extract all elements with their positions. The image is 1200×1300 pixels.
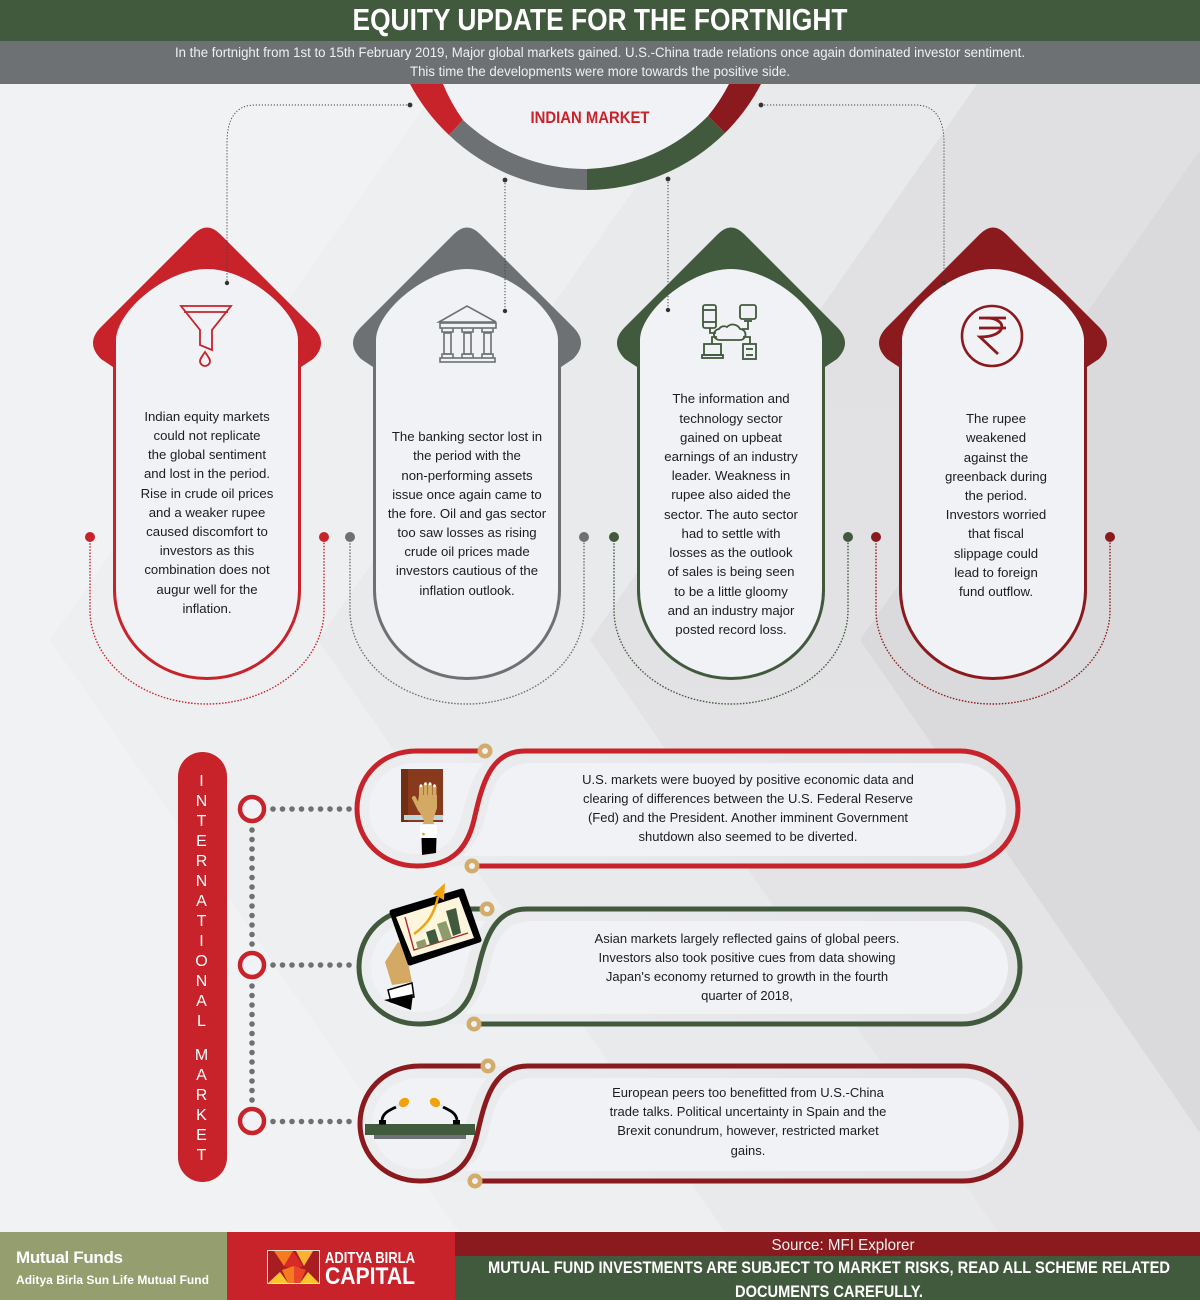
text: rupee: lead to foreign [954,565,1038,580]
text: indian equity: Rise in crude oil prices [141,486,274,501]
text: information technology: The information and [672,391,790,406]
card 4: rupee [871,228,1115,704]
text: banking: the fore. Oil and gas sector [388,506,547,521]
text: indian equity: Indian equity markets [144,409,270,424]
international market vertical label: O [195,953,208,970]
text: indian equity: investors as this [160,543,255,558]
text: indian equity: caused discomfort to [146,524,268,539]
text: rupee: Investors worried [946,507,1046,522]
international market vertical label [178,752,227,1182]
international market vertical label: R [196,853,207,870]
card 2: banking [345,228,589,704]
intro text band [0,41,1200,84]
text: U.S. markets: clearing of differences between the U.S. Federal Reserve [583,791,913,806]
text: information technology: posted record loss. [675,622,787,637]
international market vertical label: R [196,1087,207,1104]
international market vertical label: N [196,973,207,990]
text: European peers: trade talks. Political uncertainty in Spain and the [610,1104,886,1119]
international market vertical label: L [197,1013,206,1030]
icon: cloud network [702,305,756,359]
text: banking: crude oil prices made [404,544,530,559]
international market vertical label: I [199,773,204,790]
text: Asian markets: quarter of 2018, [701,988,793,1003]
footer: mutual funds panel: Aditya Birla Sun Life Mutual Fund [16,1273,209,1287]
text: U.S. markets: shutdown also seemed to be diverted. [639,829,857,844]
text: European peers: gains. [731,1143,765,1158]
text: indian equity: the global sentiment [148,447,266,462]
icon: aditya birla logo [267,1250,320,1284]
dotted arc card 3 [609,532,853,704]
text: information technology: sector. The auto sector [664,507,799,522]
indian market semicircle [410,84,761,190]
intro text band: This time the developments were more towards the positive side. [410,64,790,79]
text: rupee: slippage could [954,546,1038,561]
international market vertical label: T [197,813,207,830]
international market vertical label: N [196,873,207,890]
text: European peers: European peers too benefitted from U.S.-China [612,1085,885,1100]
text: information technology: leader. Weakness in [672,468,790,483]
text: information technology: losses as the outlook [669,545,793,560]
international market vertical label: N [196,793,207,810]
footer: logo panel: CAPITAL [325,1263,415,1290]
icon: rupee [962,306,1022,366]
text: Asian markets: Investors also took positive cues from data showing [599,950,895,965]
text: indian equity: inflation. [182,601,232,616]
international market vertical label: T [197,913,207,930]
text: European peers: Brexit conundrum, however, restricted market [617,1123,879,1138]
dotted arc card 4 [871,532,1115,704]
text: indian equity: could not replicate [153,428,261,443]
international market vertical label: A [196,893,207,910]
international market vertical label: A [196,1067,207,1084]
text: banking: investors cautious of the [396,563,538,578]
indian market semicircle: INDIAN MARKET [530,108,650,127]
international market vertical label: I [199,933,204,950]
text: information technology: had to settle with [682,526,780,541]
text: banking: inflation outlook. [419,583,515,598]
text: information technology: of sales is being seen [668,564,794,579]
text: Asian markets: Japan's economy returned to growth in the fourth [606,969,888,984]
card 1: indian equity [85,228,329,704]
header title bar: EQUITY UPDATE FOR THE FORTNIGHT [352,2,848,37]
intro text band: In the fortnight from 1st to 15th February 2019, Major global markets gained. U.S.-China trade relations once again dominated investor sentiment. [175,45,1025,60]
text: Asian markets: Asian markets largely reflected gains of global peers. [595,931,899,946]
footer: source and disclaimer [455,1232,1200,1300]
row 2: Asian markets [359,883,1020,1032]
text: rupee: the period. [965,488,1027,503]
card 3: information technology [609,228,853,704]
footer: logo panel: ADITYA BIRLA [325,1250,415,1267]
text: information technology: gained on upbeat [680,430,782,445]
connector lines from market circle [225,103,946,313]
text: banking: the period with the [413,448,521,463]
text: rupee: that fiscal [968,526,1024,541]
text: U.S. markets: U.S. markets were buoyed by positive economic data and [582,772,914,787]
international market vertical label: M [195,1047,208,1064]
text: banking: too saw losses as rising [397,525,537,540]
text: banking: The banking sector lost in [392,429,542,444]
text: information technology: rupee also aided the [671,487,791,502]
row 3: European peers [360,1058,1021,1188]
icon: hand holding tablet chart [384,883,479,1010]
international market vertical label: E [196,833,207,850]
text: indian equity: combination does not [144,562,270,577]
icon: hand on book [401,769,443,855]
text: banking: issue once again came to [392,487,542,502]
dotted arc card 2 [345,532,589,704]
dotted arc card 1 [85,532,329,704]
text: indian equity: and lost in the period. [144,466,270,481]
text: indian equity: augur well for the [156,582,258,597]
text: rupee: greenback during [945,469,1047,484]
text: rupee: against the [964,450,1028,465]
icon: podium with microphones [365,1096,475,1139]
header title bar [0,0,1200,41]
footer: mutual funds panel [0,1232,227,1300]
international market vertical label: E [196,1127,207,1144]
text: information technology: and an industry major [668,603,795,618]
text: rupee: weakened [965,430,1026,445]
icon: funnel [181,306,231,366]
row 1: U.S. markets [357,744,1018,874]
footer: source and disclaimer: Source: MFI Explorer [772,1237,915,1254]
international market vertical label: A [196,993,207,1010]
text: rupee: The rupee [966,411,1026,426]
text: information technology: technology sector [679,411,783,426]
footer: logo panel [227,1232,455,1300]
international market vertical label: K [196,1107,207,1124]
text: information technology: earnings of an industry [664,449,798,464]
timeline nodes and dotted connectors [240,797,350,1133]
text: information technology: to be a little gloomy [674,584,788,599]
international market vertical label: T [197,1147,207,1164]
text: rupee: fund outflow. [959,584,1033,599]
text: banking: non-performing assets [401,468,533,483]
text: indian equity: and a weaker rupee [149,505,265,520]
text: U.S. markets: (Fed) and the President. Another imminent Government [588,810,908,825]
icon: bank [439,306,496,362]
footer: mutual funds panel: Mutual Funds [16,1248,123,1267]
